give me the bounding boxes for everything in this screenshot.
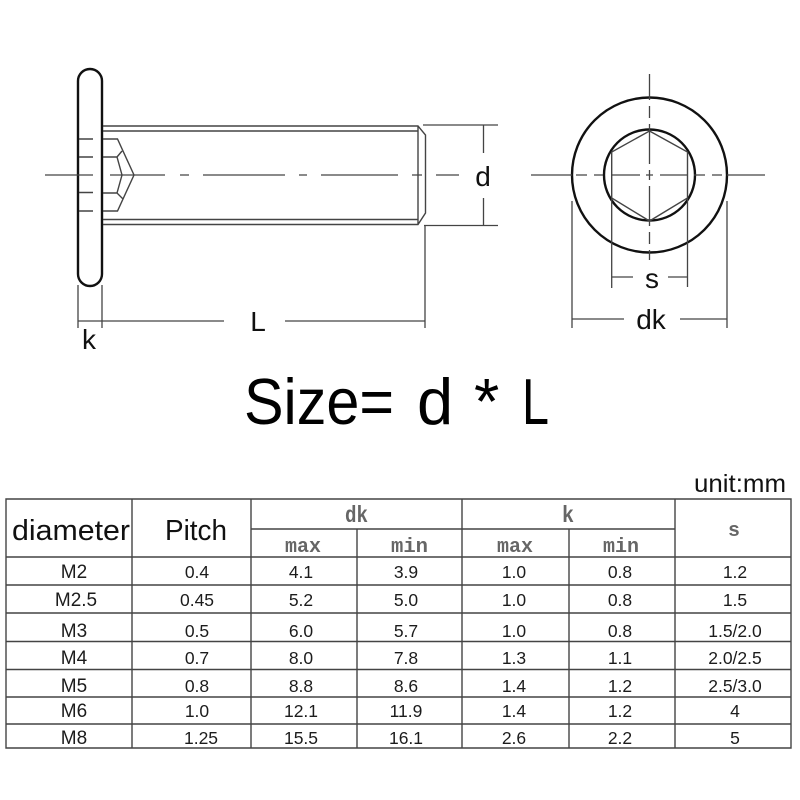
row M5 bbox=[61, 676, 762, 697]
row M4: 1.1 bbox=[608, 648, 632, 668]
table header: s bbox=[728, 520, 740, 543]
row M6: 1.2 bbox=[608, 701, 632, 721]
row M2: 1.2 bbox=[723, 562, 747, 582]
row M5: 8.6 bbox=[394, 676, 418, 696]
bolt head bbox=[78, 69, 102, 286]
table header: Pitch bbox=[165, 515, 227, 547]
dimension d bbox=[423, 125, 498, 226]
dimension d: d bbox=[475, 161, 491, 192]
row M8: 1.25 bbox=[184, 728, 218, 748]
row M8 bbox=[61, 728, 740, 749]
row M3: 6.0 bbox=[289, 621, 313, 641]
size formula title: L bbox=[522, 365, 549, 438]
hex socket side view bbox=[79, 139, 134, 211]
row M3: 1.0 bbox=[502, 621, 526, 641]
row M2: 0.4 bbox=[185, 562, 209, 582]
row M2.5 bbox=[55, 590, 747, 611]
row M6: 4 bbox=[730, 701, 740, 721]
row M2: 0.8 bbox=[608, 562, 632, 582]
row M3: 0.8 bbox=[608, 621, 632, 641]
row M4: 7.8 bbox=[394, 648, 418, 668]
table header: diameter bbox=[12, 515, 130, 547]
row M6 bbox=[61, 701, 740, 722]
table header: max bbox=[285, 536, 321, 559]
hexagon socket bbox=[612, 131, 688, 221]
row M2.5: 1.0 bbox=[502, 590, 526, 610]
table grid bbox=[6, 499, 791, 748]
dimension dk: dk bbox=[636, 304, 667, 335]
row M2.5: 5.0 bbox=[394, 590, 418, 610]
specification table bbox=[6, 499, 791, 749]
table header: max bbox=[497, 536, 533, 559]
table header: min bbox=[603, 536, 639, 559]
row M3: 5.7 bbox=[394, 621, 418, 641]
row M2: 1.0 bbox=[502, 562, 526, 582]
row M2: M2 bbox=[61, 562, 87, 583]
dimension k: k bbox=[82, 324, 97, 355]
outer head circle bbox=[572, 98, 727, 252]
row M4: 2.0/2.5 bbox=[708, 648, 762, 668]
row M3: 1.5/2.0 bbox=[708, 621, 762, 641]
row M4: M4 bbox=[61, 648, 88, 669]
row M2.5: 5.2 bbox=[289, 590, 313, 610]
dimension s: s bbox=[645, 263, 659, 294]
table header: k bbox=[562, 503, 574, 529]
row M2 bbox=[61, 562, 747, 583]
row M5: 2.5/3.0 bbox=[708, 676, 762, 696]
unit note: unit:mm bbox=[694, 470, 786, 498]
row M3 bbox=[61, 621, 762, 642]
size formula title: * bbox=[474, 365, 499, 438]
row M5: 1.4 bbox=[502, 676, 526, 696]
row M4: 8.0 bbox=[289, 648, 313, 668]
dimension L bbox=[102, 226, 425, 337]
dimension dk bbox=[572, 201, 727, 335]
side view drawing of bolt bbox=[45, 69, 498, 355]
row M2: 4.1 bbox=[289, 562, 313, 582]
side view centre line bbox=[45, 174, 459, 176]
dimension s bbox=[612, 198, 688, 294]
row M3: M3 bbox=[61, 621, 87, 642]
threaded shank bbox=[103, 126, 426, 224]
dimension L: L bbox=[250, 306, 266, 337]
size formula title: d bbox=[417, 365, 453, 438]
row M8: 16.1 bbox=[389, 728, 423, 748]
row M8: 15.5 bbox=[284, 728, 318, 748]
row M6: 12.1 bbox=[284, 701, 318, 721]
row M8: 5 bbox=[730, 728, 740, 748]
table header: dk bbox=[345, 503, 368, 529]
row M5: 8.8 bbox=[289, 676, 313, 696]
row M2.5: 1.5 bbox=[723, 590, 747, 610]
end view drawing of bolt bbox=[531, 74, 765, 335]
row M2.5: 0.45 bbox=[180, 590, 214, 610]
size formula title: Size= bbox=[244, 365, 394, 438]
row M5: 1.2 bbox=[608, 676, 632, 696]
row M4: 1.3 bbox=[502, 648, 526, 668]
row M3: 0.5 bbox=[185, 621, 209, 641]
row M2: 3.9 bbox=[394, 562, 418, 582]
table header bbox=[12, 503, 740, 559]
dimension k bbox=[78, 285, 102, 355]
row M6: 1.0 bbox=[185, 701, 209, 721]
end view centre lines bbox=[531, 74, 765, 260]
row M4 bbox=[61, 648, 762, 669]
row M6: 11.9 bbox=[390, 701, 422, 721]
row M6: 1.4 bbox=[502, 701, 526, 721]
row M8: 2.6 bbox=[502, 728, 526, 748]
row M2.5: 0.8 bbox=[608, 590, 632, 610]
row M5: M5 bbox=[61, 676, 87, 697]
row M8: 2.2 bbox=[608, 728, 632, 748]
row M2.5: M2.5 bbox=[55, 590, 97, 611]
row M6: M6 bbox=[61, 701, 87, 722]
row M4: 0.7 bbox=[185, 648, 209, 668]
table header: min bbox=[391, 536, 428, 559]
socket circle bbox=[604, 130, 695, 220]
row M8: M8 bbox=[61, 728, 87, 749]
row M5: 0.8 bbox=[185, 676, 209, 696]
